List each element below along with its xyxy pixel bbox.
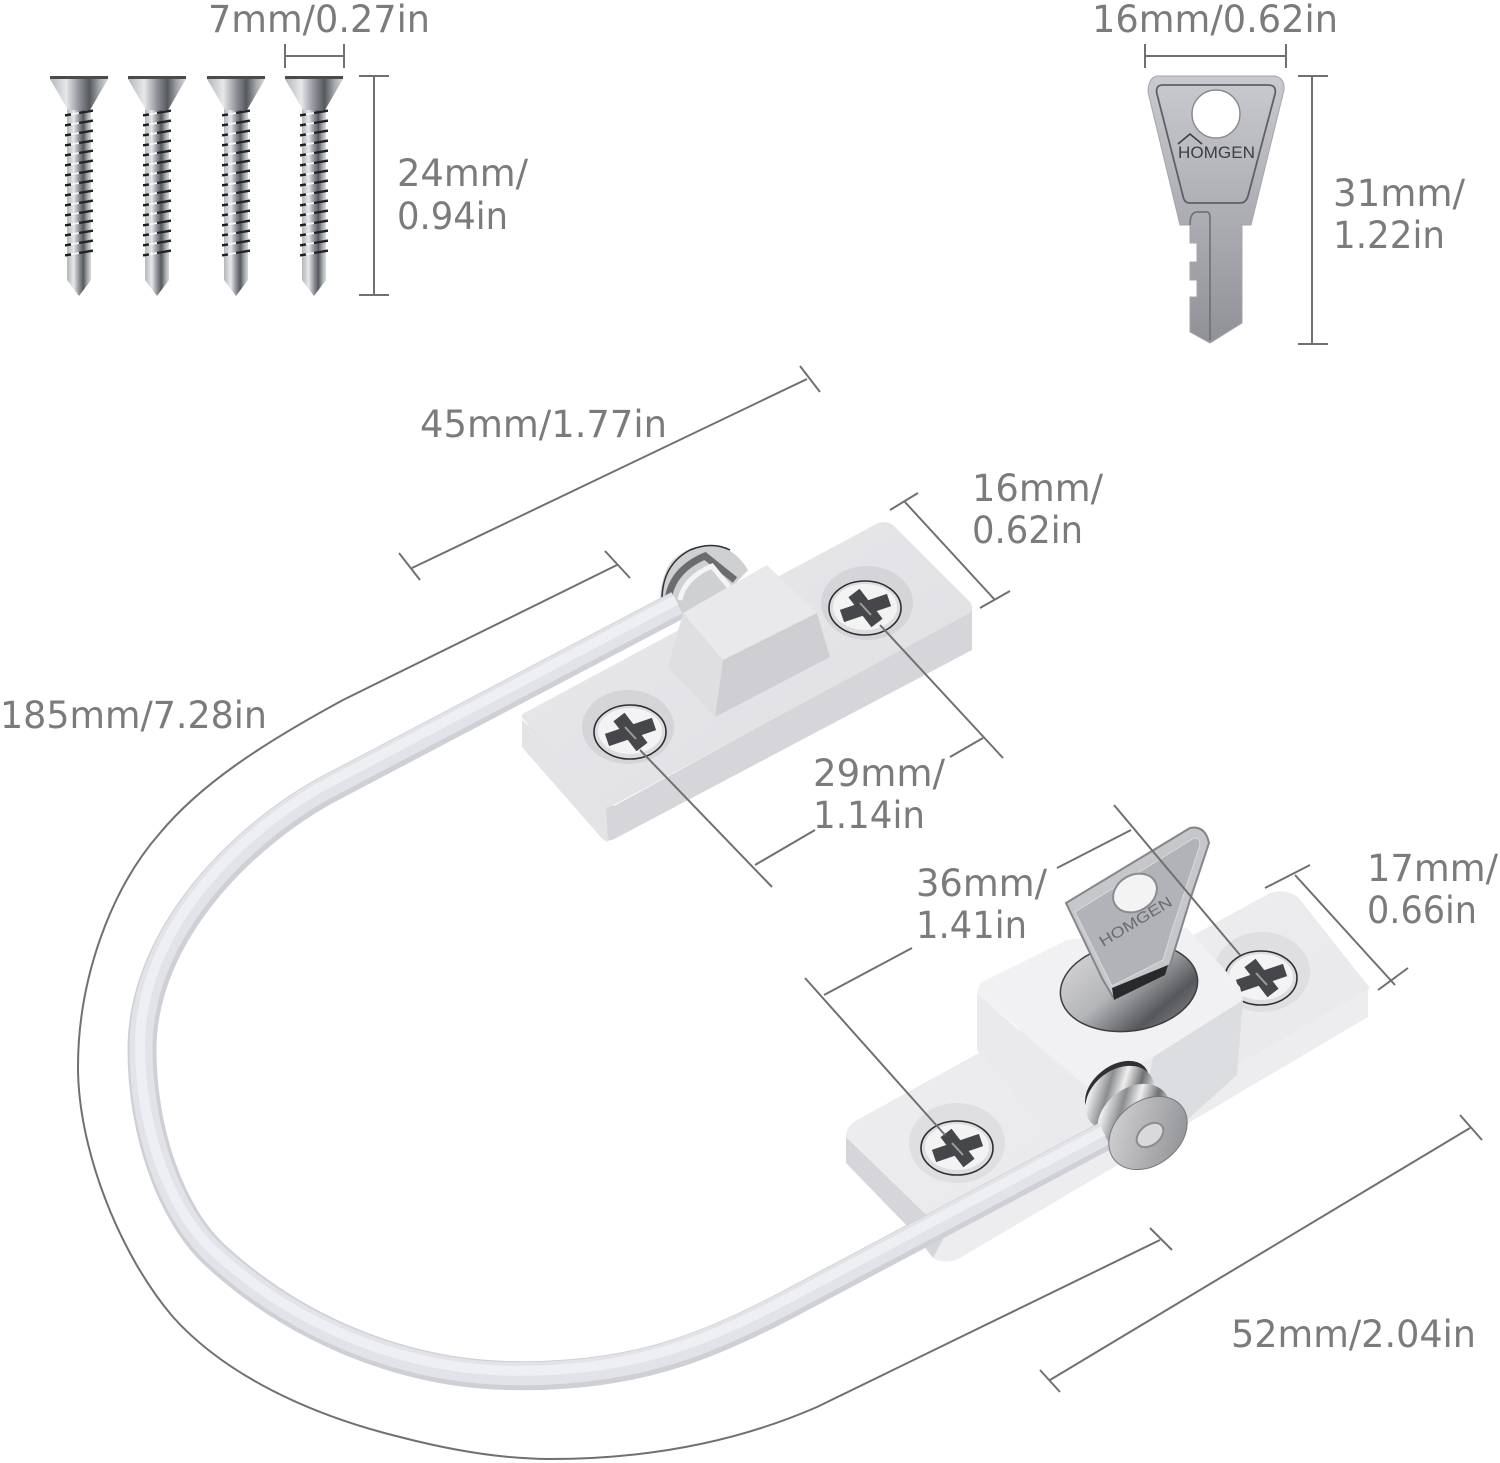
bracket housing [668,565,830,717]
cable [140,600,1105,1376]
dimension: cable length: 185mm/7.28in [0,694,267,737]
lock cylinder [1055,934,1203,1040]
dimension: bottom screw spacing: 36mm/ [916,862,1048,905]
dimension: screw length: 0.94in [397,195,508,238]
bottom bracket [846,828,1370,1262]
screw head left [594,705,666,759]
dimension: bottom bracket width: 17mm/ [1367,847,1499,890]
dimension: bottom screw spacing: 1.41in [916,904,1027,947]
dimension: top bracket length [399,366,820,580]
roller disc [1094,1081,1202,1185]
key brand on lock key: HOMGEN [1096,894,1175,950]
dimension: key height [1298,76,1466,344]
screw 3 [207,76,265,296]
roller body [1073,1049,1184,1166]
dimension: key height: 1.22in [1333,214,1445,257]
dimension: key width [1092,0,1338,68]
icon: key [1148,76,1284,343]
dimension: top bracket width: 0.62in [972,509,1083,552]
screw 4 [285,76,343,296]
screw head right [829,581,901,635]
dimension: top bracket width: 16mm/ [972,467,1104,510]
bracket plate [522,522,972,842]
key brand: HOMGEN [1178,143,1255,162]
dimension: screw length: 24mm/ [397,152,529,195]
top bracket [522,522,972,842]
dimension: bottom screw spacing [805,805,1240,1135]
dimension: top bracket width [890,467,1104,608]
screw 2 [128,76,186,296]
screws [50,76,343,296]
lock housing [977,928,1243,1140]
screw 1 [50,76,108,296]
dimension: screw width [208,0,430,68]
screw head upper right [1225,951,1297,1005]
dimension: top screw spacing [640,625,1003,887]
dimension: top bracket length: 45mm/1.77in [420,403,667,446]
top bracket stud [660,545,748,620]
dimension: top screw spacing: 1.14in [813,794,925,837]
dimension: bottom bracket width [1265,847,1499,990]
dimension: top screw spacing: 29mm/ [813,752,946,795]
dimension: bottom bracket width: 0.66in [1367,889,1477,932]
bottom bracket plate [846,891,1370,1262]
screw head lower left [921,1121,993,1175]
key in lock [1066,828,1209,1000]
dimension: bottom bracket length: 52mm/2.04in [1231,1313,1476,1356]
dimension: key height: 31mm/ [1333,172,1466,215]
dimension: bottom bracket length [1040,1115,1482,1392]
dimension: screw length [359,76,529,295]
